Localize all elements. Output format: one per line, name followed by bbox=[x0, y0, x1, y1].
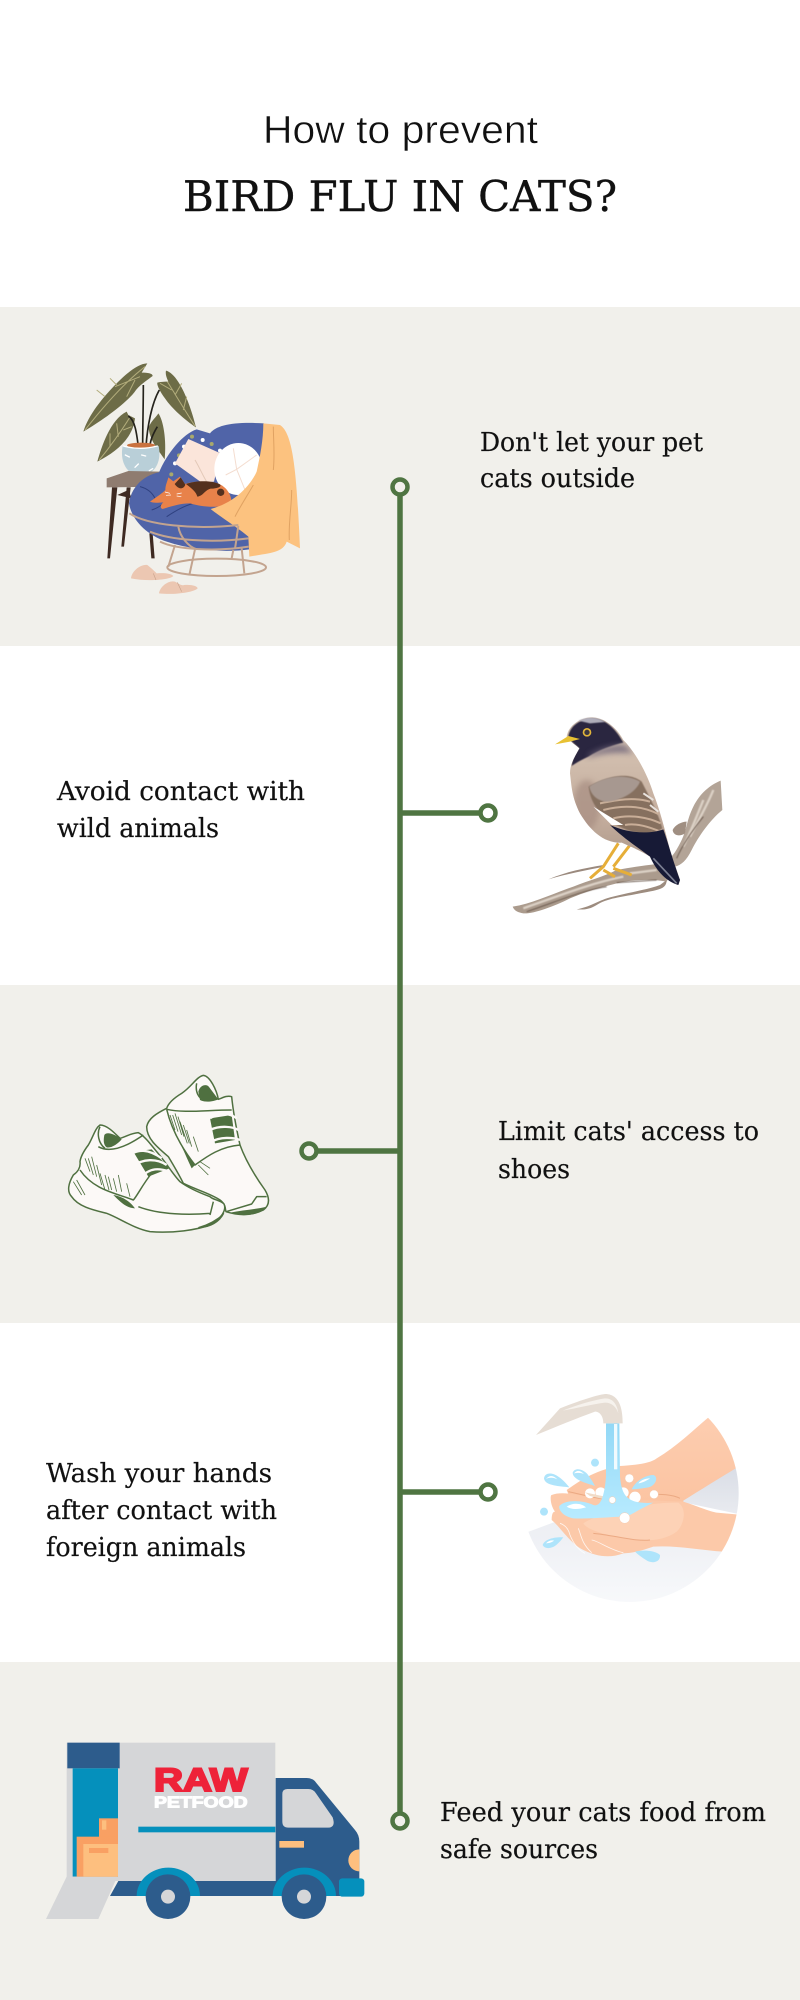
text: wash your hands bbox=[46, 1459, 277, 1563]
text: don't let cats outside: Don't let your pet bbox=[480, 428, 704, 458]
illustration: pair of shoes bbox=[69, 1075, 269, 1232]
text: feed safe food bbox=[440, 1798, 766, 1865]
illustration: washing hands bbox=[528, 1394, 739, 1598]
panel: avoid wild animals bbox=[56, 717, 722, 914]
text: don't let cats outside: cats outside bbox=[480, 464, 635, 494]
text: feed safe food: safe sources bbox=[440, 1835, 598, 1865]
text: wash your hands: foreign animals bbox=[46, 1533, 246, 1563]
text: limit access: Limit cats' access to bbox=[498, 1117, 759, 1147]
text: limit access: shoes bbox=[498, 1155, 570, 1185]
text: avoid contact: wild animals bbox=[57, 814, 219, 844]
text: limit access bbox=[498, 1117, 759, 1185]
subtitle: How to prevent bbox=[263, 109, 538, 152]
back shoe bbox=[147, 1075, 269, 1215]
brand text: RAW bbox=[154, 1762, 249, 1798]
front shoe bbox=[69, 1125, 225, 1232]
text: avoid contact bbox=[56, 777, 305, 844]
panel: keep cats indoors bbox=[0, 307, 800, 646]
panel: safe food sources bbox=[0, 1662, 800, 2000]
panel: wash hands bbox=[46, 1394, 739, 1598]
illustration: cat on armchair bbox=[83, 363, 300, 594]
text: avoid contact: Avoid contact with bbox=[56, 777, 305, 807]
brand text bbox=[154, 1762, 249, 1811]
illustration: pet food delivery truck bbox=[46, 1743, 364, 1919]
title: BIRD FLU IN CATS? bbox=[183, 172, 617, 221]
title block bbox=[183, 109, 617, 221]
panel: limit access to shoes bbox=[0, 985, 800, 1323]
illustration: bird on branch bbox=[513, 717, 722, 913]
text: feed safe food: Feed your cats food from bbox=[440, 1798, 766, 1828]
text: wash your hands: after contact with bbox=[46, 1496, 277, 1526]
brand text: PETFOOD bbox=[154, 1794, 248, 1811]
timeline bbox=[302, 480, 496, 1828]
text: don't let cats outside bbox=[480, 428, 704, 494]
text: wash your hands: Wash your hands bbox=[46, 1459, 272, 1489]
